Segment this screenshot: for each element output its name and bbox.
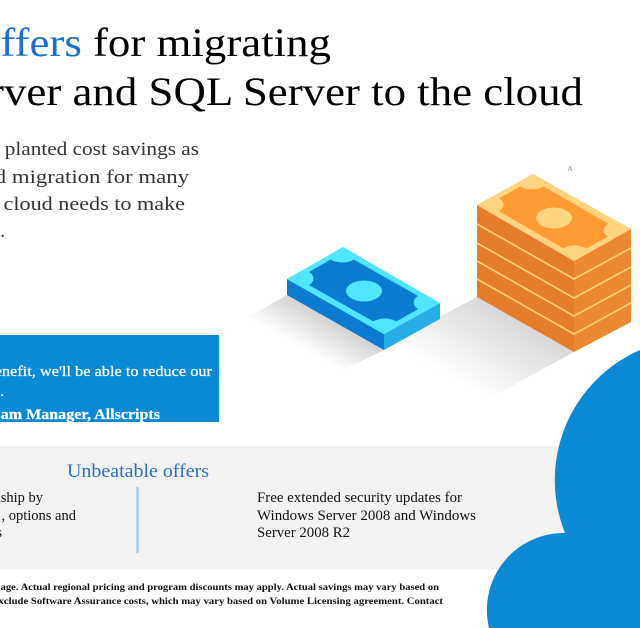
intro paragraph: . xyxy=(0,221,5,242)
offer: left column xyxy=(0,490,77,541)
intro paragraph: cloud needs to make xyxy=(4,194,185,215)
footnote: xclude Software Assurance costs, which may vary based on Volume Licensing agreement. Contact xyxy=(0,597,444,607)
small mark: A xyxy=(567,165,573,173)
offer: right column: Server 2008 R2 xyxy=(257,525,350,541)
icon: blue money bill xyxy=(282,244,446,350)
intro paragraph: planted cost savings as xyxy=(5,139,199,160)
offer: left column: , options and xyxy=(1,508,77,524)
offer: right column xyxy=(257,490,476,541)
quote box: am Manager, Allscripts xyxy=(1,406,160,423)
offers heading: Unbeatable offers xyxy=(67,461,209,482)
quote box xyxy=(0,335,219,423)
intro paragraph xyxy=(0,139,199,242)
offer: left column: ship by xyxy=(1,490,44,506)
intro paragraph: d migration for many xyxy=(0,166,190,188)
shadow: orange stack xyxy=(390,297,574,398)
offer: right column: Free extended security updates for xyxy=(257,490,462,506)
offers band xyxy=(0,446,640,569)
icon: orange money stack xyxy=(472,170,636,352)
title xyxy=(0,21,583,114)
shadow: blue bill xyxy=(247,295,384,373)
offer: right column: Windows Server 2008 and Windows xyxy=(257,508,476,524)
footnote xyxy=(0,583,444,607)
cloud shape xyxy=(487,350,640,628)
footnote: age. Actual regional pricing and program discounts may apply. Actual savings may vary based on xyxy=(1,583,440,593)
quote box: enefit, we'll be able to reduce our xyxy=(0,364,213,380)
